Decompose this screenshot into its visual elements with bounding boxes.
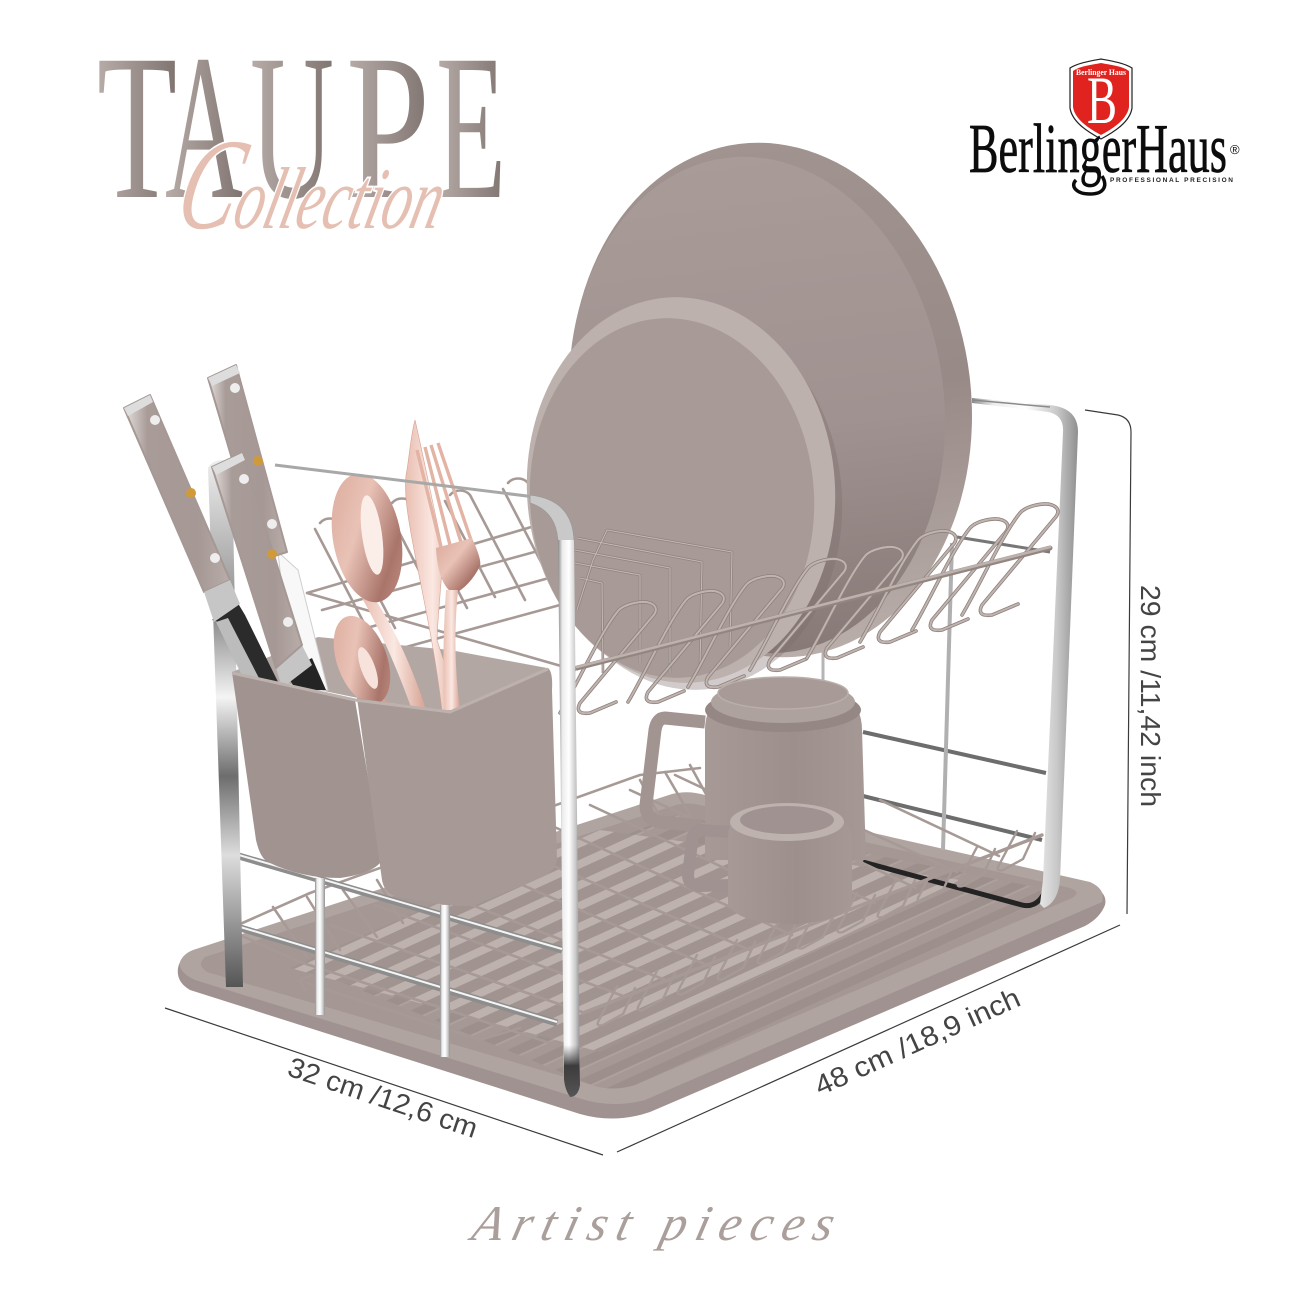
back chrome rails — [823, 543, 1050, 906]
logo shield — [1070, 59, 1132, 139]
dimension line height — [1085, 410, 1131, 914]
lower wire rack — [238, 765, 1042, 1045]
holder interior — [232, 637, 547, 712]
brand logo: Berlinger Haus — [969, 59, 1240, 194]
knife front — [212, 453, 326, 690]
dimension line width — [165, 1008, 603, 1155]
spoon large — [322, 468, 426, 710]
large plate — [541, 120, 1001, 680]
dimension line length — [617, 925, 1120, 1152]
title letters TAUPE: P — [346, 12, 430, 242]
logo registered mark: ® — [1230, 142, 1240, 157]
dimension label length: 48 cm /18,9 inch — [810, 982, 1025, 1101]
rear rack wires behind plates — [307, 478, 583, 670]
spoon small — [323, 608, 402, 712]
back chrome post — [972, 398, 1078, 908]
logo tagline: PROFESSIONAL PRECISION — [1110, 177, 1233, 184]
upper rack front wires — [560, 504, 1058, 713]
logo shield: Berlinger Haus — [1076, 68, 1126, 77]
knife rear — [208, 365, 328, 690]
drip tray — [178, 792, 1105, 1119]
knives — [124, 365, 328, 690]
tagline: Artist pieces: Artist pieces — [464, 1196, 841, 1251]
knife left — [124, 395, 282, 690]
dimension: height — [1085, 410, 1166, 914]
holder rim — [232, 669, 548, 712]
cutlery holder — [232, 668, 557, 906]
holder left compartment — [232, 672, 382, 878]
logo shield: B — [1087, 62, 1117, 138]
dimension label height: 29 cm /11,42 inch — [1135, 585, 1166, 807]
small mug — [688, 803, 852, 924]
small plate — [514, 287, 855, 700]
dimension: width — [165, 1008, 603, 1155]
front chrome frame — [275, 465, 580, 1097]
left chrome post — [208, 460, 243, 987]
fork — [417, 443, 480, 710]
logo g descender swash — [1074, 176, 1105, 194]
title letters TAUPE: T — [97, 12, 177, 242]
title letters TAUPE: A — [165, 12, 243, 242]
front chrome rails — [225, 851, 562, 1057]
title: TAUPE Collection — [97, 12, 506, 257]
product: dish rack — [124, 120, 1105, 1119]
dimension label width: 32 cm /12,6 cm — [284, 1051, 482, 1144]
large mug — [646, 677, 866, 860]
rose gold cutlery — [322, 420, 480, 712]
table knife — [405, 420, 460, 710]
title script Collection: Collection — [165, 112, 465, 257]
plate dividers — [575, 530, 732, 673]
holder right compartment — [357, 668, 557, 906]
title letters TAUPE: U — [250, 12, 334, 242]
title letters TAUPE — [97, 12, 506, 242]
title letters TAUPE: E — [436, 12, 506, 242]
dimension: length — [617, 925, 1120, 1152]
